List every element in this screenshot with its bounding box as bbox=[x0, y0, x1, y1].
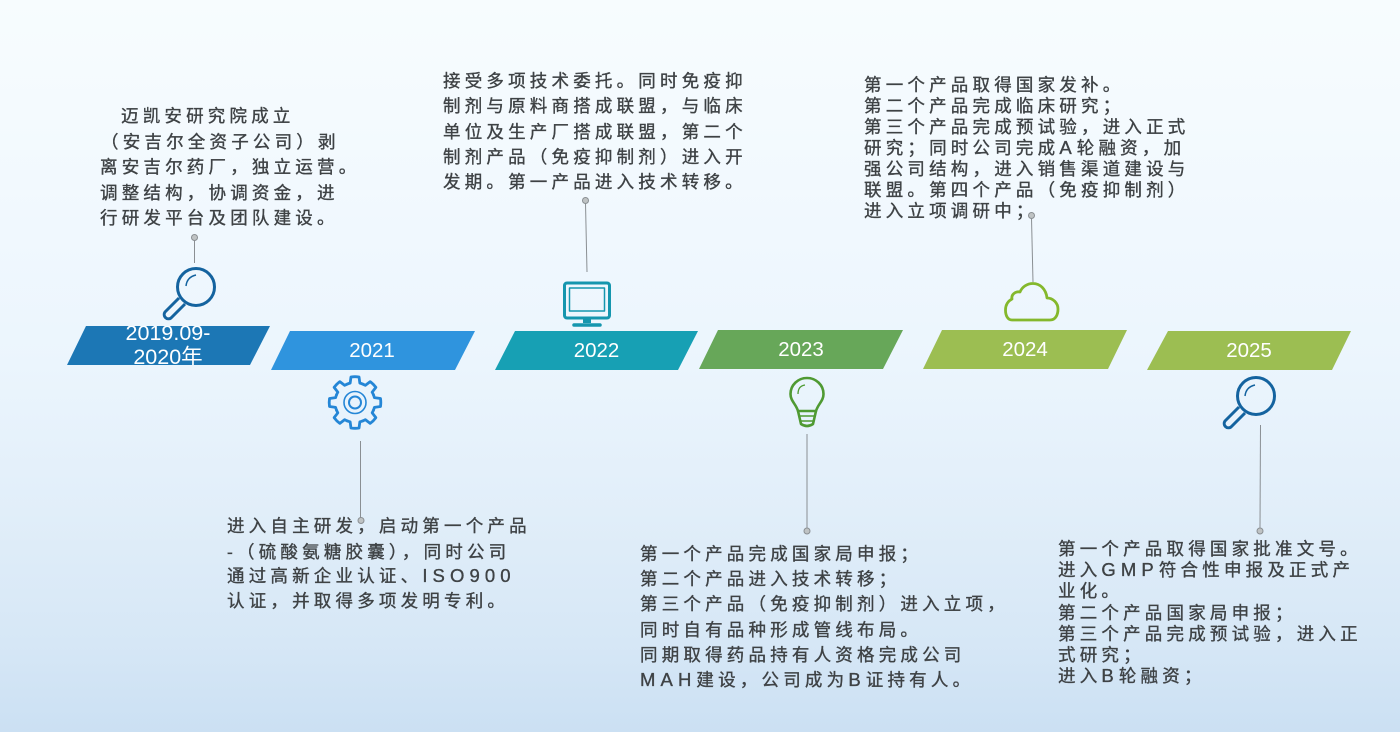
text block: 2022: 制剂产品（免疫抑制剂）进入开 bbox=[443, 147, 747, 167]
text block: 2024: 联盟。第四个产品（免疫抑制剂） bbox=[864, 180, 1190, 200]
text block: 2021: 通过高新企业认证、ISO900 bbox=[227, 565, 516, 586]
text block: 2025 bbox=[1058, 539, 1362, 686]
text block: 2022 bbox=[443, 71, 747, 192]
text block: 2019 bbox=[100, 106, 360, 228]
connector: 2022 bbox=[582, 198, 588, 272]
year label: 2022: 2022 bbox=[574, 339, 619, 362]
text block: 2025: 进入B轮融资； bbox=[1058, 665, 1206, 686]
text block: 2024: 进入立项调研中； bbox=[864, 201, 1038, 221]
text block: 2021 bbox=[227, 516, 531, 611]
text block: 2022: 制剂与原料商搭成联盟，与临床 bbox=[443, 96, 747, 116]
text block: 2024: 研究；同时公司完成A轮融资，加 bbox=[864, 137, 1185, 158]
icon: magnifier 2025 bbox=[1224, 378, 1274, 428]
year label: 2024: 2024 bbox=[1002, 338, 1048, 361]
text block: 2022: 单位及生产厂搭成联盟，第二个 bbox=[443, 122, 747, 142]
year bar: 2023 bbox=[699, 330, 903, 369]
text block: 2024: 第三个产品完成预试验，进入正式 bbox=[864, 117, 1190, 137]
text block: 2025: 第二个产品国家局申报； bbox=[1058, 603, 1297, 623]
year bar: 2022 bbox=[495, 331, 698, 370]
icon: light bulb bbox=[790, 378, 824, 426]
year label: 2021: 2021 bbox=[349, 339, 395, 362]
text block: 2024: 第二个产品完成临床研究； bbox=[864, 96, 1124, 116]
icon: cloud bbox=[1006, 284, 1058, 320]
year bar: 2019.09-2020 bbox=[67, 326, 270, 365]
text block: 2024 bbox=[864, 75, 1190, 221]
text block: 2024: 第一个产品取得国家发补。 bbox=[864, 75, 1124, 95]
connector: 2025 bbox=[1257, 425, 1263, 534]
text block: 2023: MAH建设，公司成为B证持有人。 bbox=[640, 669, 974, 690]
text block: 2023: 同期取得药品持有人资格完成公司 bbox=[640, 645, 966, 665]
year bar: 2024 bbox=[923, 330, 1127, 369]
text block: 2023: 第一个产品完成国家局申报； bbox=[640, 544, 922, 564]
text block: 2019: （安吉尔全资子公司）剥 bbox=[101, 132, 340, 152]
icon: monitor bbox=[564, 283, 610, 325]
icon: magnifier 2019 bbox=[164, 268, 214, 319]
text block: 2025: 业化。 bbox=[1058, 581, 1123, 601]
text block: 2019: 离安吉尔药厂，独立运营。 bbox=[100, 157, 360, 177]
text block: 2023 bbox=[640, 544, 1009, 690]
text block: 2025: 进入GMP符合性申报及正式产 bbox=[1058, 559, 1354, 580]
year label: 2019.09-2020年 bbox=[126, 326, 210, 365]
text block: 2023: 同时自有品种形成管线布局。 bbox=[640, 620, 922, 640]
connector: 2019 bbox=[192, 234, 198, 263]
connector: 2021 bbox=[358, 441, 364, 524]
text block: 2025: 式研究； bbox=[1058, 645, 1145, 665]
text block: 2025: 第三个产品完成预试验，进入正 bbox=[1058, 624, 1362, 644]
text block: 2022: 接受多项技术委托。同时免疫抑 bbox=[443, 71, 747, 91]
text block: 2021: -（硫酸氨糖胶囊），同时公司 bbox=[227, 542, 510, 562]
icon: gear bbox=[329, 377, 381, 428]
text block: 2025: 第一个产品取得国家批准文号。 bbox=[1058, 539, 1362, 559]
text block: 2019: 迈凯安研究院成立 bbox=[121, 106, 295, 126]
year bar: 2025 bbox=[1147, 331, 1351, 370]
connector: 2023 bbox=[804, 434, 810, 534]
connector: 2024 bbox=[1028, 212, 1034, 282]
text block: 2021: 进入自主研发，启动第一个产品 bbox=[227, 516, 531, 536]
year label: 2023: 2023 bbox=[778, 338, 824, 361]
text block: 2023: 第二个产品进入技术转移； bbox=[640, 569, 900, 589]
text block: 2022: 发期。第一产品进入技术转移。 bbox=[443, 172, 747, 192]
text block: 2021: 认证，并取得多项发明专利。 bbox=[227, 591, 509, 611]
text block: 2023: 第三个产品（免疫抑制剂）进入立项， bbox=[640, 594, 1009, 614]
text block: 2019: 调整结构，协调资金，进 bbox=[100, 182, 339, 202]
text block: 2024: 强公司结构，进入销售渠道建设与 bbox=[864, 159, 1190, 179]
year label: 2025: 2025 bbox=[1226, 339, 1272, 362]
year bar: 2021 bbox=[271, 331, 475, 370]
text block: 2019: 行研发平台及团队建设。 bbox=[100, 208, 339, 228]
